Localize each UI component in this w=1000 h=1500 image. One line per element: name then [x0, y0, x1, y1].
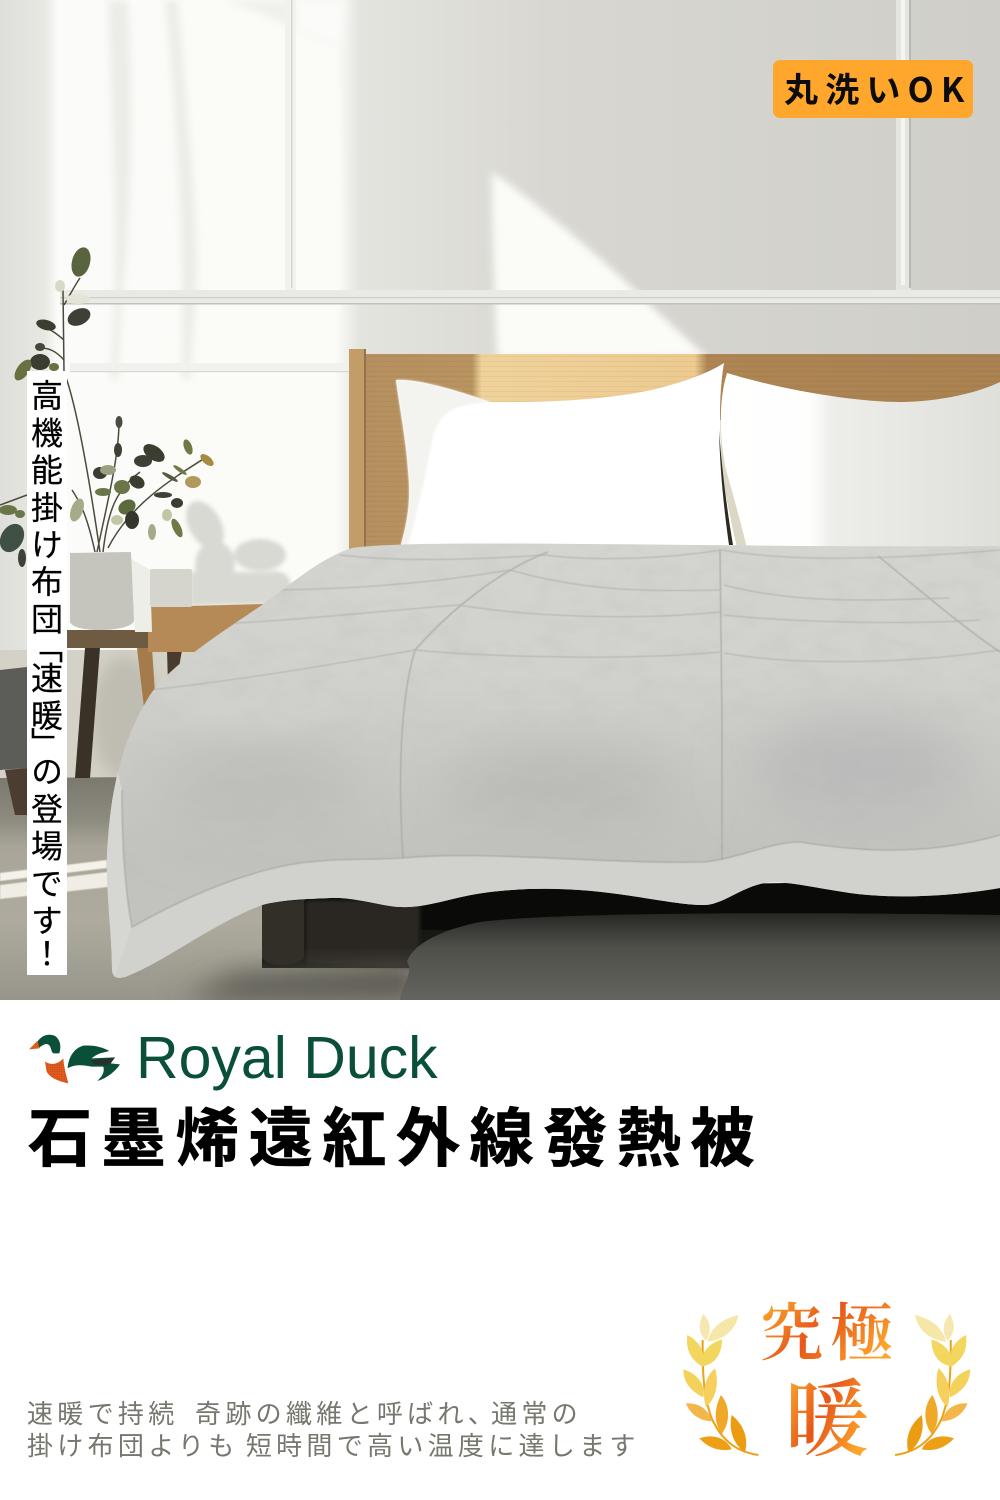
laurel wreath: right — [895, 1314, 970, 1455]
headboard — [349, 349, 1000, 554]
badge: machine washable: 丸洗いOK — [784, 63, 972, 112]
stool — [0, 667, 27, 770]
left pillow edge shade — [396, 380, 490, 545]
duck wing — [68, 1045, 120, 1081]
hem stitching and quilting verticals — [122, 550, 1000, 927]
plant shadow on wall — [178, 494, 292, 606]
duvet — [100, 540, 1000, 1000]
left pillow — [396, 363, 737, 548]
curtain folds — [108, 0, 345, 380]
right pillow — [721, 373, 1000, 552]
hem band — [107, 791, 1000, 978]
area behind legs — [0, 650, 290, 785]
bed leg — [262, 900, 304, 966]
award text: ultimate warmth: 究極 — [760, 1299, 900, 1369]
quilting horizontals — [150, 550, 1000, 690]
plant leaves — [0, 245, 216, 567]
sun streak on floor — [0, 860, 108, 899]
gap between pillows — [716, 420, 750, 550]
product title: 石墨烯遠紅外線發熱被 — [28, 1103, 764, 1175]
leaves left of caption bar — [0, 520, 29, 556]
description text: 掛け布団よりも 短時間で高い温度に達します — [27, 1431, 640, 1461]
rug — [400, 913, 1000, 1000]
duck head — [38, 1035, 60, 1053]
logo: duck icon — [29, 1035, 120, 1083]
floor shadow beside leg — [180, 964, 420, 1000]
product photo: bedroom scene — [0, 0, 1000, 1000]
under-bed shadow — [262, 880, 1000, 1000]
vertical caption bar — [27, 371, 67, 975]
upper stem leaves — [68, 245, 94, 279]
sunlight patch on wall — [492, 172, 708, 358]
duck wing speculum — [91, 1057, 115, 1066]
floor — [0, 775, 440, 1000]
dark line between pillows — [719, 430, 733, 545]
main cluster — [116, 416, 122, 428]
duck beak — [29, 1041, 39, 1049]
wall moulding — [60, 0, 1000, 372]
award text: ultimate warmth — [760, 1299, 900, 1468]
left outer hem highlight — [107, 773, 122, 976]
fabric shading — [474, 749, 648, 814]
vertical caption text: 高機能掛け布団「 速暖」 の登場です！ — [27, 378, 63, 974]
brand name: Royal Duck — [136, 1025, 438, 1091]
award text: ultimate warmth: 暖 — [785, 1375, 869, 1468]
duck breast — [45, 1058, 68, 1083]
table legs — [75, 648, 100, 778]
plant pot and vase — [70, 552, 192, 632]
nightstand and stool — [0, 604, 440, 1000]
description text: 速暖で持続 奇跡の纖維と呼ばれ、通常の — [27, 1399, 582, 1429]
table top — [148, 604, 265, 652]
laurel wreath: left — [683, 1314, 758, 1455]
light band right of curtain — [295, 0, 345, 380]
description text — [27, 1399, 640, 1461]
lower table shelf — [67, 630, 152, 648]
wall — [0, 0, 1000, 790]
